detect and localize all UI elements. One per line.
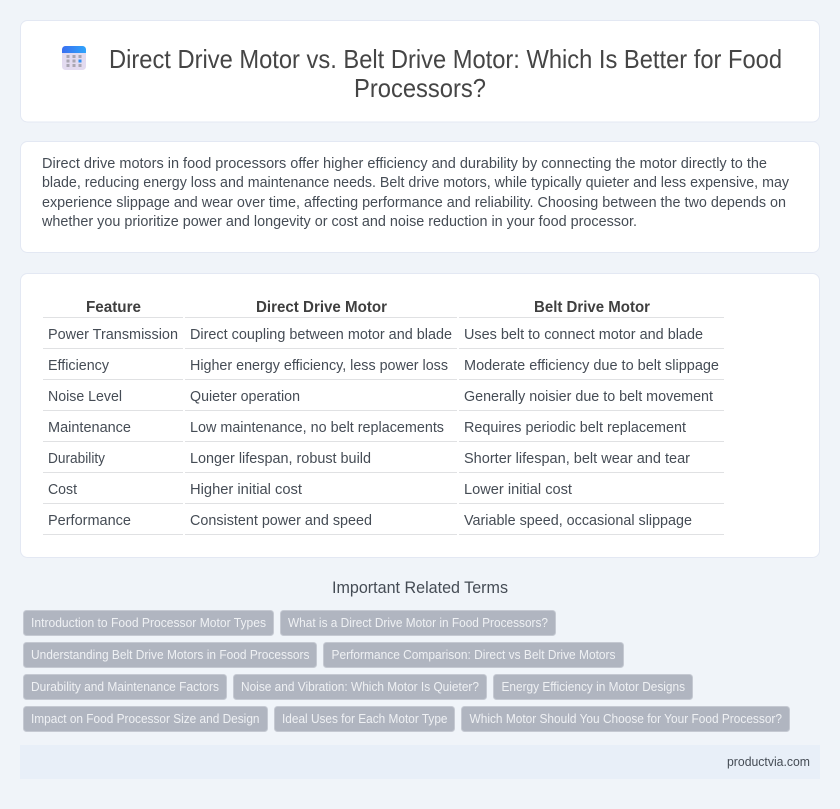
table row: noise level (43, 389, 724, 411)
tag: Ideal Uses for Each Motor Type (282, 711, 448, 726)
title: Direct Drive Motor vs. Belt Drive Motor: Which Is Better for Food (109, 44, 782, 74)
table row: efficiency: Moderate efficiency due to belt slippage (464, 358, 719, 374)
table row: efficiency: Efficiency (48, 358, 110, 374)
text block: description paragraph: whether you prioritize power and longevity or cost and noise reduction in your food processor. (41, 213, 637, 230)
tag list: related terms (24, 610, 790, 732)
tag: Energy Efficiency in Motor Designs (502, 679, 685, 694)
footer: productvia.com (727, 754, 810, 769)
table row: power transmission (43, 327, 724, 349)
table header: Direct Drive Motor (256, 299, 387, 316)
table row: noise level: Quieter operation (190, 389, 300, 405)
table row: performance: Consistent power and speed (190, 513, 372, 529)
table row: durability: Durability (48, 451, 106, 467)
tag (280, 610, 556, 636)
text block: description paragraph: experience slippage and wear over time, affecting performance and reliability. Choosing between the two depends on (42, 194, 786, 211)
tag (462, 706, 790, 732)
tag (324, 642, 624, 668)
table row: efficiency: Higher energy efficiency, less power loss (190, 358, 448, 374)
tag (24, 642, 316, 668)
tag: Introduction to Food Processor Motor Types (31, 615, 266, 630)
table header: Feature (86, 299, 141, 316)
table row: power transmission: Power Transmission (48, 327, 178, 343)
table row: maintenance: Maintenance (48, 420, 131, 436)
tag (494, 674, 692, 700)
table row: maintenance (43, 420, 724, 442)
panel: comparison table (20, 274, 820, 558)
table row: cost: Higher initial cost (190, 482, 302, 498)
table header (43, 299, 724, 318)
text block: description paragraph: blade, reducing energy loss and maintenance needs. Belt drive motors, while typically quieter and less expensive, may (42, 174, 789, 191)
text block: description paragraph: Direct drive motors in food processors offer higher efficiency and durability by connecting the motor directly to the (42, 155, 767, 172)
table row: performance (43, 513, 724, 535)
footer (20, 745, 820, 779)
table row: durability: Shorter lifespan, belt wear and tear (464, 451, 690, 467)
tag: Understanding Belt Drive Motors in Food Processors (31, 647, 310, 662)
table row: power transmission: Direct coupling between motor and blade (190, 327, 452, 343)
tag: Impact on Food Processor Size and Design (31, 711, 260, 726)
tag: What is a Direct Drive Motor in Food Processors? (288, 615, 548, 630)
table row: noise level: Generally noisier due to belt movement (464, 389, 713, 405)
table row: maintenance: Requires periodic belt replacement (464, 420, 686, 436)
tag (24, 674, 226, 700)
tag: Noise and Vibration: Which Motor Is Quieter? (241, 679, 479, 694)
text block: description paragraph (41, 155, 789, 230)
icon: calendar (62, 46, 86, 70)
title: Processors? (354, 73, 486, 103)
panel: title card (20, 20, 820, 122)
title (109, 44, 782, 103)
tag: Durability and Maintenance Factors (31, 679, 219, 694)
tag: Performance Comparison: Direct vs Belt Drive Motors (332, 647, 616, 662)
panel: description (20, 142, 820, 252)
heading: important related terms: Important Related Terms (332, 579, 508, 597)
table row: cost: Lower initial cost (464, 482, 572, 498)
table row: durability: Longer lifespan, robust build (190, 451, 371, 467)
tag: Which Motor Should You Choose for Your Food Processor? (470, 711, 782, 726)
tag (274, 706, 454, 732)
table row: durability (43, 451, 724, 473)
table row: power transmission: Uses belt to connect motor and blade (464, 327, 703, 343)
table row: cost: Cost (48, 482, 77, 498)
table row: cost (43, 482, 724, 504)
table row: performance: Performance (48, 513, 131, 529)
table row: noise level: Noise Level (48, 389, 122, 405)
table row: efficiency (43, 358, 724, 380)
tag (24, 706, 268, 732)
tag (24, 610, 274, 636)
table row: maintenance: Low maintenance, no belt replacements (190, 420, 444, 436)
table header: Belt Drive Motor (534, 299, 650, 316)
tag (234, 674, 486, 700)
table row: performance: Variable speed, occasional slippage (464, 513, 692, 529)
